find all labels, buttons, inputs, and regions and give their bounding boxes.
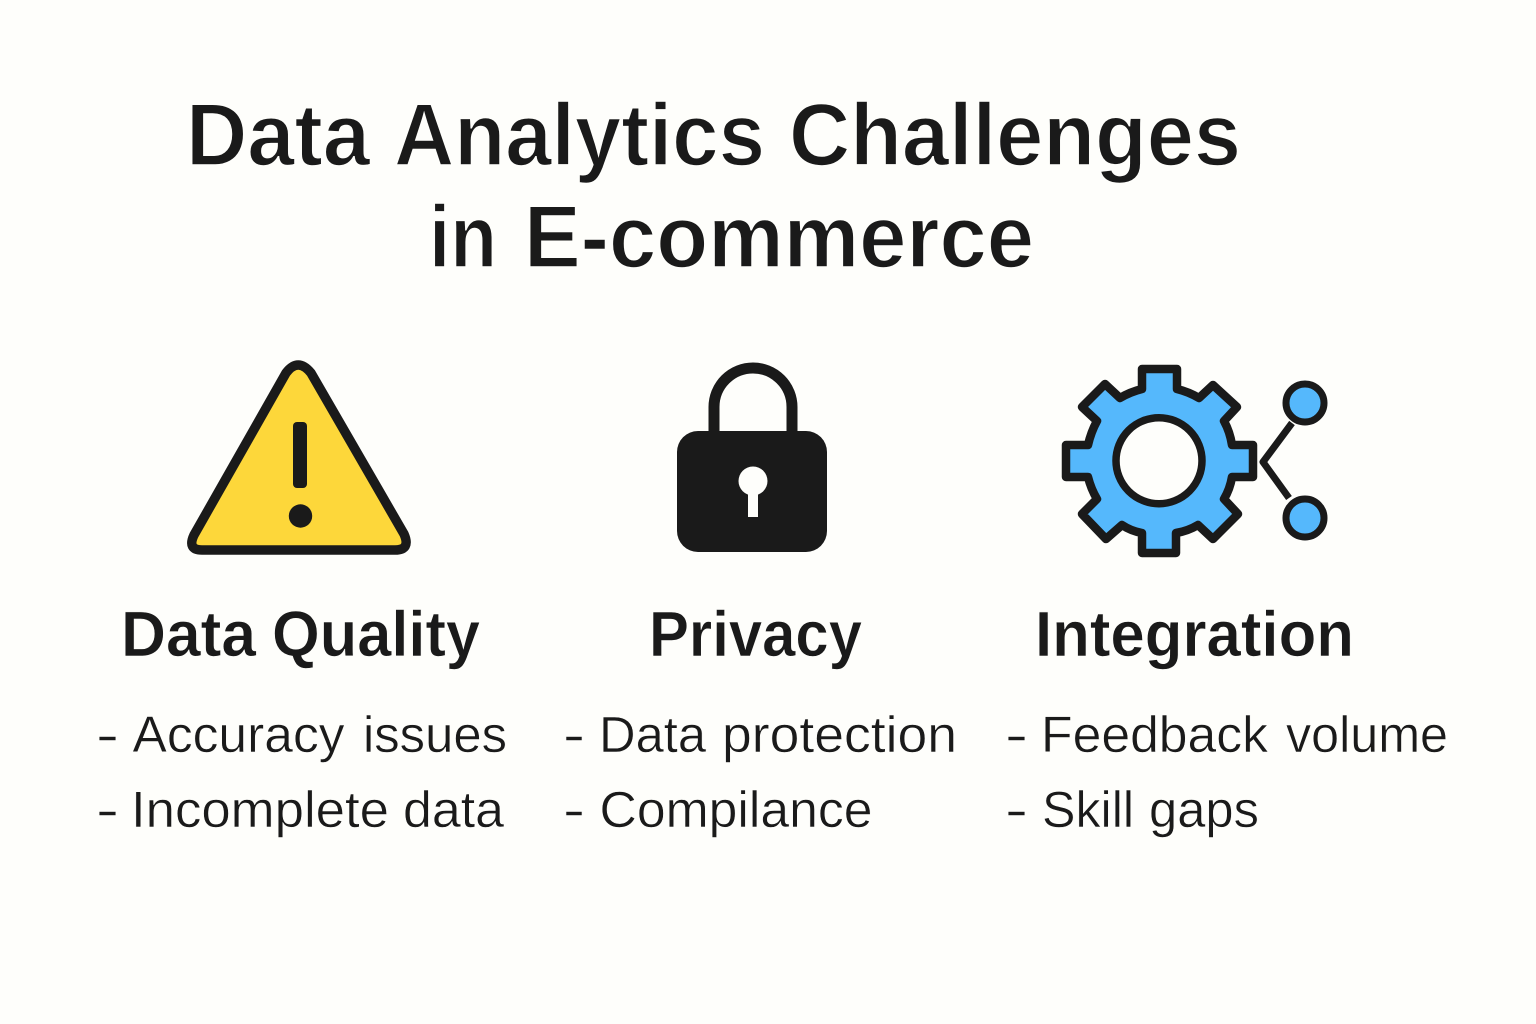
icon: gear with connected nodes (1066, 369, 1324, 553)
list: integration items: volume (1286, 706, 1448, 763)
list: integration items (1005, 706, 1448, 838)
list: privacy items: - (563, 781, 585, 838)
list: privacy items: - (563, 706, 585, 763)
list: data quality items: Accuracy (132, 706, 345, 763)
heading: Data Quality: Data (121, 598, 256, 670)
heading: Privacy: Privacy (649, 598, 862, 670)
list: integration items: - (1005, 706, 1028, 763)
column: Privacy (563, 598, 957, 838)
list: data quality items: issues (363, 706, 507, 763)
list: privacy items (563, 706, 957, 838)
heading: Integration: Integration (1035, 598, 1354, 670)
list: data quality items: Incomplete (131, 781, 389, 838)
heading: Data Quality: Quality (272, 598, 480, 670)
column: Integration (1005, 598, 1448, 838)
title: Challenges (789, 85, 1241, 184)
title (186, 85, 1241, 286)
list: data quality items: data (403, 781, 505, 838)
list: integration items: Skill (1042, 781, 1134, 838)
title: Analytics (394, 85, 765, 184)
list: privacy items: Compilance (600, 781, 872, 838)
list: integration items: - (1005, 781, 1028, 838)
list: integration items: Feedback (1041, 706, 1268, 763)
list: data quality items (96, 706, 507, 838)
title: E-commerce (524, 187, 1034, 286)
title: in (429, 187, 497, 286)
icon: warning triangle (192, 365, 406, 550)
title: Data (186, 85, 371, 184)
list: privacy items: Data (599, 706, 707, 763)
list: privacy items: protection (722, 706, 957, 763)
column: Data Quality (96, 598, 507, 838)
list: data quality items: - (96, 706, 119, 763)
icon: padlock (677, 368, 827, 552)
list: integration items: gaps (1149, 781, 1259, 838)
list: data quality items: - (96, 781, 119, 838)
